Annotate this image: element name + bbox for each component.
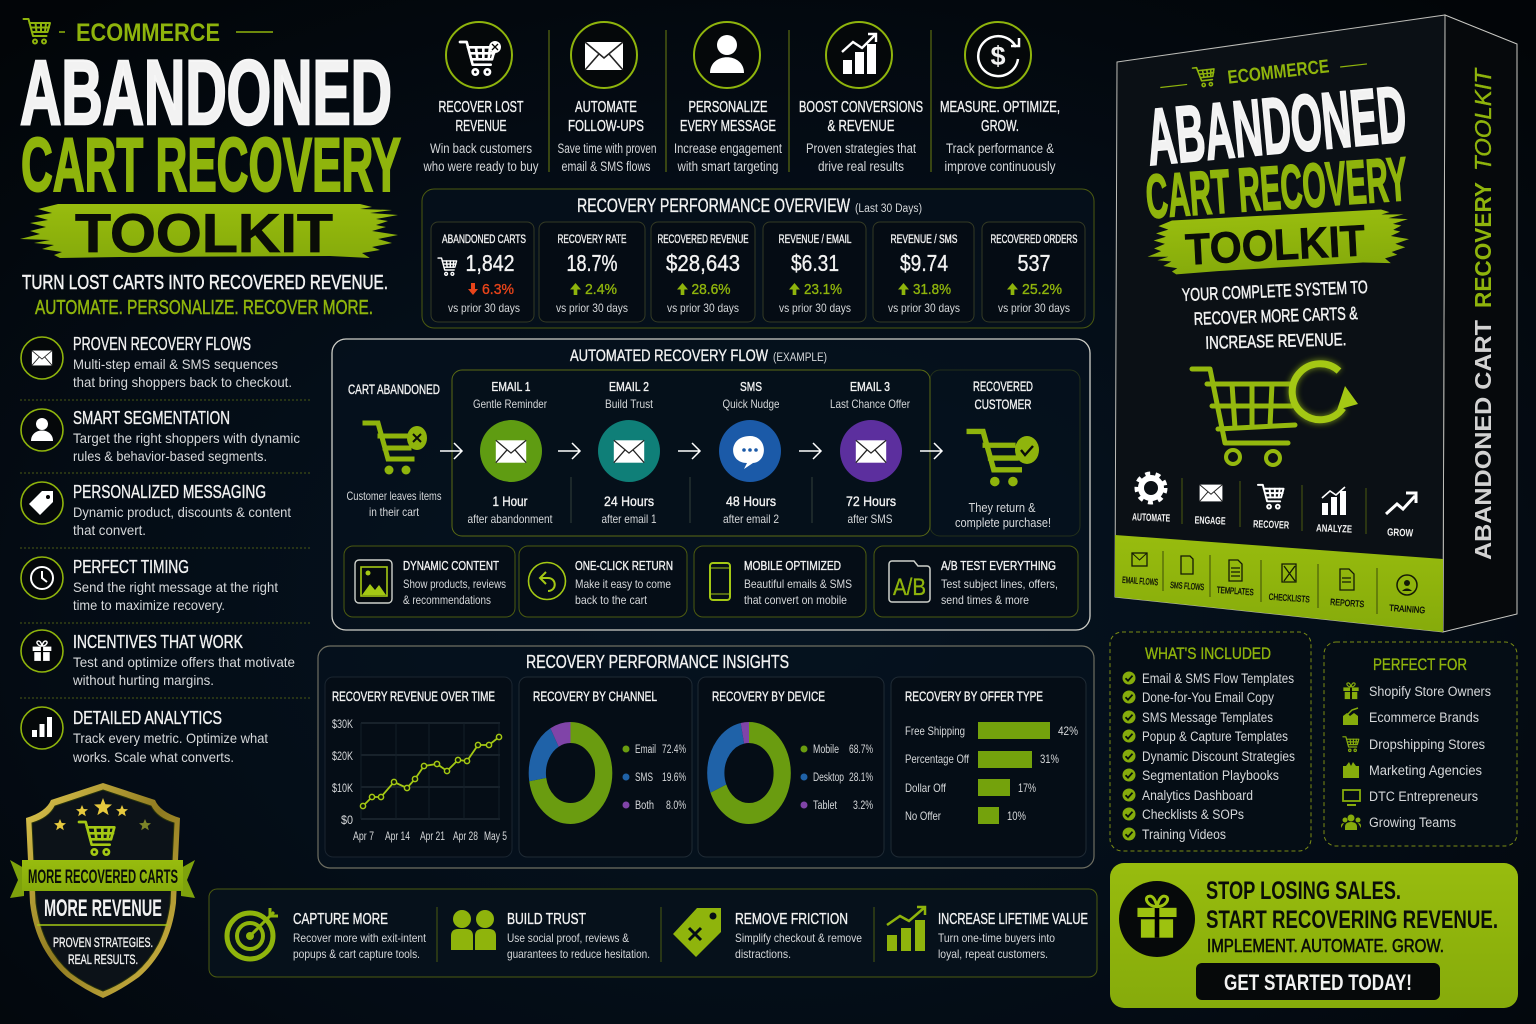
audience list: Shopify Store Owners (1369, 684, 1491, 699)
benefit: build trust: Use social proof, reviews & (507, 931, 629, 945)
metric: recovery rate: RECOVERY RATE (558, 234, 627, 246)
benefit: capture more: popups & cart capture tools. (293, 947, 420, 961)
metric: recovered revenue: vs prior 30 days (667, 301, 739, 315)
metric: revenue per email: REVENUE / EMAIL (778, 234, 852, 246)
chart: recovery by offer type: 31% (1040, 752, 1059, 766)
metric: revenue per sms (873, 222, 974, 322)
panel: benefits list (20, 334, 310, 765)
metric: revenue per sms: 31.8% (913, 281, 951, 298)
chart: recovery by channel: 8.0% (666, 800, 686, 812)
chart: revenue over time: Apr 28 (453, 831, 478, 843)
band item: training (1389, 575, 1426, 615)
band item: checklists: CHECKLISTS (1268, 592, 1310, 604)
chart: recovery by offer type: 10% (1007, 809, 1026, 823)
ribbon: more recovered carts (10, 860, 195, 898)
metric: recovered orders: RECOVERED ORDERS (990, 234, 1078, 246)
box icon: recover: RECOVER (1253, 518, 1290, 532)
metric: revenue per email: 23.1% (804, 281, 842, 298)
box tagline (1181, 277, 1368, 353)
strip: bottom benefits (209, 889, 1097, 977)
panel: automated recovery flow (332, 339, 1090, 630)
metric: recovered orders: 537 (1018, 250, 1050, 276)
value prop: recover lost revenue: Win back customers (430, 141, 532, 156)
header: ecommerce eyebrow (24, 19, 273, 47)
step: email 3 (830, 379, 910, 526)
chart: revenue over time: Apr 14 (385, 831, 410, 843)
included checklist (1122, 671, 1295, 842)
flow start: cart abandoned: in their cart (369, 505, 420, 519)
chart: recovery by device: 68.7% (849, 744, 873, 756)
panel: perfect for: PERFECT FOR (1373, 655, 1467, 674)
metric: abandoned carts: ABANDONED CARTS (442, 234, 526, 246)
box side: ABANDONED CART (1470, 320, 1496, 560)
chart: recovery by offer type: Dollar Off (905, 781, 947, 795)
callout: call to action: STOP LOSING SALES. (1206, 877, 1401, 905)
box eyebrow: ECOMMERCE (1227, 56, 1330, 89)
chart: recovery by channel: 19.6% (662, 772, 686, 784)
included checklist: SMS Message Templates (1142, 710, 1273, 725)
box icon: engage (1194, 485, 1226, 528)
step: email 1: 1 Hour (492, 493, 528, 509)
benefit: increase lifetime value: Turn one-time buyers into (938, 931, 1055, 945)
band item: templates: TEMPLATES (1216, 585, 1254, 597)
box tagline: INCREASE REVENUE. (1205, 329, 1347, 353)
benefit: proven recovery flows: Multi-step email & SMS sequences (73, 356, 278, 372)
value prop: boost conversions: Proven strategies that (806, 141, 916, 156)
chart: revenue over time: May 5 (484, 831, 507, 843)
chart: recovery by offer type: RECOVERY BY OFFER TYPE (905, 689, 1043, 704)
chart: recovery by channel: Both (635, 800, 654, 812)
benefit: personalized messaging: that convert. (73, 522, 146, 538)
value prop: boost conversions: BOOST CONVERSIONS (799, 99, 923, 116)
band item: email flows: EMAIL FLOWS (1122, 575, 1159, 587)
chart: recovery by channel (519, 677, 692, 857)
benefit: perfect timing: PERFECT TIMING (73, 557, 189, 577)
flow end: recovered customer: CUSTOMER (974, 397, 1032, 412)
benefit: capture more: CAPTURE MORE (293, 911, 388, 928)
panel: what's included (1110, 632, 1311, 851)
subtitle: TURN LOST CARTS INTO RECOVERED REVENUE. (22, 272, 388, 294)
chart: revenue over time (325, 677, 512, 857)
metric: abandoned carts: 1,842 (466, 250, 514, 276)
included checklist: Analytics Dashboard (1142, 788, 1253, 803)
header: ecommerce eyebrow: ECOMMERCE (76, 19, 220, 47)
chart: recovery by channel: Email (635, 744, 656, 756)
benefit: personalized messaging: Dynamic product, discounts & content (73, 504, 291, 520)
benefit: incentives that work (21, 630, 295, 688)
step: email 2: after email 1 (602, 512, 657, 526)
value prop: personalize every message: PERSONALIZE (688, 99, 768, 116)
icon: gift (1119, 881, 1195, 957)
value prop: measure optimize grow: GROW. (981, 118, 1019, 135)
benefit: proven recovery flows: PROVEN RECOVERY FLOWS (73, 334, 251, 354)
chart: revenue over time: $30K (332, 719, 353, 731)
metric: recovered orders: vs prior 30 days (998, 301, 1070, 315)
box icon: grow: GROW (1387, 527, 1413, 539)
metric: recovered orders: 25.2% (1022, 281, 1062, 298)
callout: call to action (1110, 863, 1518, 1008)
benefit: detailed analytics (21, 707, 268, 765)
step: email 3: 72 Hours (846, 493, 896, 509)
metric: revenue per email (763, 222, 866, 322)
benefit: remove friction: distractions. (735, 947, 791, 961)
flow end: recovered customer: complete purchase! (955, 515, 1051, 530)
panel: performance insights: RECOVERY PERFORMANCE INSIGHTS (526, 652, 789, 672)
flow start: cart abandoned (346, 382, 442, 519)
step: sms (719, 379, 781, 526)
step: email 2: EMAIL 2 (609, 379, 649, 394)
step: sms: Quick Nudge (722, 397, 780, 411)
chart: recovery by channel: 72.4% (662, 744, 686, 756)
feature: dynamic content (344, 546, 515, 617)
metric: revenue per sms: REVENUE / SMS (890, 234, 958, 246)
feature: a/b test everything (874, 546, 1078, 617)
value prop: measure optimize grow: Track performance & (946, 141, 1054, 156)
metric: recovered orders (982, 222, 1085, 322)
subtitle: AUTOMATE. PERSONALIZE. RECOVER MORE. (35, 297, 373, 319)
box front (1115, 15, 1445, 632)
box icon: recover (1253, 485, 1290, 532)
box side: RECOVERY (1470, 182, 1496, 308)
chart: recovery by device: RECOVERY BY DEVICE (712, 689, 825, 704)
chart: recovery by offer type: Percentage Off (905, 752, 970, 766)
benefit: perfect timing (21, 557, 278, 613)
feature: dynamic content: & recommendations (403, 593, 491, 607)
feature: a/b test everything: Test subject lines, offers, (941, 577, 1058, 591)
band item: reports (1330, 569, 1365, 609)
value prop: boost conversions: & REVENUE (828, 118, 894, 135)
benefit: detailed analytics: Track every metric. Optimize what (73, 730, 268, 746)
box title: TOOLKIT (1184, 216, 1367, 275)
band item: sms flows (1170, 556, 1205, 592)
included checklist: Dynamic Discount Strategies (1142, 749, 1295, 764)
badge: shield: MORE REVENUE (44, 895, 162, 922)
benefit: incentives that work: Test and optimize offers that motivate (73, 654, 295, 670)
band item: templates (1216, 560, 1254, 597)
top value props (423, 22, 1060, 174)
button: get started: GET STARTED TODAY! (1224, 970, 1412, 995)
box eyebrow (1159, 48, 1368, 96)
audience list (1341, 683, 1491, 830)
audience list: Dropshipping Stores (1369, 737, 1485, 752)
flow end: recovered customer: They return & (968, 500, 1036, 515)
icon: stars (54, 798, 151, 830)
box icon: engage: ENGAGE (1194, 514, 1226, 528)
step: sms: SMS (740, 379, 762, 394)
chart: recovery by device: 28.1% (849, 772, 873, 784)
chart: recovery by offer type: Free Shipping (905, 724, 965, 738)
benefit: remove friction (673, 908, 862, 961)
panel: perfect for (1324, 642, 1517, 846)
callout: call to action: IMPLEMENT. AUTOMATE. GROW. (1207, 936, 1444, 956)
metric: recovery rate: 2.4% (585, 281, 617, 298)
audience list: DTC Entrepreneurs (1369, 789, 1478, 804)
included checklist: Segmentation Playbooks (1142, 768, 1279, 783)
box icon: analyze: ANALYZE (1316, 522, 1352, 536)
benefit: personalized messaging: PERSONALIZED MESSAGING (73, 482, 266, 502)
included checklist: Email & SMS Flow Templates (1142, 671, 1294, 686)
benefit: increase lifetime value: loyal, repeat customers. (938, 947, 1048, 961)
chart: recovery by device: Mobile (813, 744, 839, 756)
badge: shield: PROVEN STRATEGIES. (53, 934, 153, 950)
chart: revenue over time: $10K (332, 783, 353, 795)
included checklist: Popup & Capture Templates (1142, 729, 1288, 744)
benefit: detailed analytics: works. Scale what converts. (72, 749, 234, 765)
chart: revenue over time: Apr 7 (353, 831, 374, 843)
badge: shield: REAL RESULTS. (68, 951, 138, 967)
panel: automated recovery flow: AUTOMATED RECOVERY FLOW (570, 346, 768, 365)
box tagline: YOUR COMPLETE SYSTEM TO (1181, 277, 1368, 305)
metric: abandoned carts: vs prior 30 days (448, 301, 520, 315)
audience list: Ecommerce Brands (1369, 710, 1479, 725)
feature: a/b test everything: A/B TEST EVERYTHING (941, 558, 1056, 573)
chart: recovery by channel: RECOVERY BY CHANNEL (533, 689, 657, 704)
chart: recovery by device: 3.2% (853, 800, 873, 812)
feature: mobile optimized: that convert on mobile (744, 593, 847, 607)
value prop: measure optimize grow: $ (990, 41, 1006, 71)
metric: revenue per sms: $9.74 (900, 250, 948, 276)
value prop: personalize every message: EVERY MESSAGE (680, 118, 776, 135)
feature: a/b test everything: A/B (893, 574, 926, 601)
step: email 2: 24 Hours (604, 493, 654, 509)
subtitle (22, 272, 388, 319)
value prop: recover lost revenue: REVENUE (456, 118, 506, 135)
metric: revenue per email: vs prior 30 days (779, 301, 851, 315)
box side: TOOLKIT (1470, 67, 1496, 171)
button: get started (1196, 963, 1440, 1000)
included checklist: Training Videos (1142, 827, 1226, 842)
value prop: boost conversions: drive real results (818, 159, 904, 174)
title: abandoned cart recovery toolkit: TOOLKIT (75, 202, 333, 264)
chart: revenue over time: Apr 21 (420, 831, 445, 843)
benefit: increase lifetime value: INCREASE LIFETIME VALUE (938, 911, 1088, 928)
badge: shield (10, 783, 195, 998)
value prop: recover lost revenue: who were ready to buy (423, 159, 539, 174)
panel: what's included: WHAT'S INCLUDED (1145, 644, 1271, 663)
benefit: smart segmentation (21, 408, 300, 464)
step: sms: 48 Hours (726, 493, 776, 509)
metric: revenue per email: $6.31 (791, 250, 839, 276)
chart: revenue over time: RECOVERY REVENUE OVER TIME (332, 689, 495, 704)
step: email 3: EMAIL 3 (850, 379, 890, 394)
benefit: proven recovery flows (21, 334, 292, 390)
benefit: smart segmentation: Target the right shoppers with dynamic (73, 430, 300, 446)
chart: recovery by offer type: 42% (1058, 724, 1078, 738)
benefit: smart segmentation: rules & behavior-based segments. (73, 448, 267, 464)
benefit: incentives that work: INCENTIVES THAT WORK (73, 632, 243, 652)
box icons row (1132, 474, 1416, 539)
title: abandoned cart recovery toolkit (20, 42, 401, 264)
step: email 1: Gentle Reminder (473, 397, 547, 411)
metric: abandoned carts: 6.3% (482, 281, 514, 298)
benefit: perfect timing: time to maximize recovery. (73, 597, 225, 613)
panel: performance overview: (Last 30 Days) (855, 203, 922, 215)
step: email 1 (468, 379, 553, 526)
value prop: measure optimize grow: improve continuously (944, 159, 1056, 174)
panel: automated recovery flow: (EXAMPLE) (773, 352, 827, 364)
feature: one-click return: back to the cart (575, 593, 648, 607)
box icon: analyze (1316, 487, 1352, 536)
benefit: capture more (227, 908, 427, 961)
feature: one-click return (519, 546, 687, 617)
feature: dynamic content: DYNAMIC CONTENT (403, 558, 499, 573)
chart: recovery by device (698, 677, 884, 857)
metric: revenue per sms: vs prior 30 days (888, 301, 960, 315)
metric: recovered revenue: 28.6% (692, 281, 730, 298)
box band: contents (1115, 535, 1443, 632)
value prop: recover lost revenue: RECOVER LOST (438, 99, 524, 116)
flow start: cart abandoned: CART ABANDONED (348, 382, 440, 397)
chart: recovery by offer type: 17% (1018, 781, 1036, 795)
metric: recovered revenue: RECOVERED REVENUE (658, 234, 749, 246)
step: email 3: Last Chance Offer (830, 397, 910, 411)
metric: recovery rate: vs prior 30 days (556, 301, 628, 315)
product box (1115, 15, 1517, 632)
box icon: automate: AUTOMATE (1132, 511, 1170, 525)
chart: revenue over time: $0 (341, 815, 353, 827)
benefit: remove friction: REMOVE FRICTION (735, 911, 848, 928)
value prop: automate follow-ups: email & SMS flows (562, 159, 651, 174)
benefit: smart segmentation: SMART SEGMENTATION (73, 408, 230, 428)
band item: sms flows: SMS FLOWS (1170, 580, 1205, 592)
panel: performance overview: RECOVERY PERFORMANCE OVERVIEW (577, 196, 850, 217)
value prop: personalize every message (674, 22, 782, 174)
value prop: boost conversions (799, 22, 923, 174)
panel: performance overview (422, 189, 1094, 328)
audience list: Growing Teams (1369, 815, 1456, 830)
chart: recovery by device: Tablet (813, 800, 838, 812)
included checklist: Checklists & SOPs (1142, 807, 1244, 822)
box title (1143, 69, 1410, 276)
benefit: capture more: Recover more with exit-intent (293, 931, 427, 945)
flow end: recovered customer: RECOVERED (973, 379, 1033, 394)
band item: email flows (1122, 553, 1159, 587)
benefit: incentives that work: without hurting margins. (72, 672, 214, 688)
value prop: personalize every message: Increase engagement (674, 141, 782, 156)
chart: recovery by offer type: No Offer (905, 809, 941, 823)
step: sms: after email 2 (723, 512, 779, 526)
box side (1443, 15, 1517, 632)
step: email 1: EMAIL 1 (492, 379, 530, 394)
benefit: personalized messaging (21, 482, 291, 538)
flow end: recovered customer (955, 379, 1051, 530)
box icon: grow (1386, 493, 1416, 539)
box icon: cart with refresh (1192, 364, 1358, 465)
band item: reports: REPORTS (1330, 597, 1365, 609)
ribbon: more recovered carts: MORE RECOVERED CARTS (28, 867, 178, 888)
panel: performance insights (318, 646, 1094, 868)
value prop: measure optimize grow: MEASURE. OPTIMIZE, (940, 99, 1060, 116)
title: abandoned cart recovery toolkit: ABANDONED (20, 42, 392, 144)
step: email 3: after SMS (848, 512, 892, 526)
value prop: recover lost revenue (423, 22, 539, 174)
metric: recovery rate (539, 222, 645, 322)
benefit: proven recovery flows: that bring shoppers back to checkout. (73, 374, 292, 390)
box tagline: RECOVER MORE CARTS & (1193, 303, 1358, 329)
benefit: perfect timing: Send the right message at the right (73, 579, 278, 595)
band item: training: TRAINING (1389, 603, 1426, 615)
value prop: measure optimize grow (940, 22, 1060, 174)
metric: recovery rate: 18.7% (566, 250, 618, 276)
value prop: automate follow-ups: Save time with proven (558, 141, 656, 156)
metric: abandoned carts (431, 222, 534, 322)
benefit: increase lifetime value (887, 907, 1088, 961)
value prop: personalize every message: with smart targeting (677, 159, 778, 174)
feature: one-click return: ONE-CLICK RETURN (575, 558, 673, 573)
feature: one-click return: Make it easy to come (575, 577, 671, 591)
step: email 1: after abandonment (468, 512, 553, 526)
benefit: build trust: BUILD TRUST (507, 911, 586, 928)
benefit: detailed analytics: DETAILED ANALYTICS (73, 708, 222, 728)
chart: recovery by offer type (891, 677, 1086, 857)
arrows between steps (440, 443, 942, 459)
value prop: automate follow-ups: FOLLOW-UPS (568, 118, 644, 135)
step: email 2: Build Trust (605, 397, 654, 411)
band item: checklists (1268, 564, 1310, 604)
chart: recovery by device: Desktop (813, 772, 844, 784)
feature: mobile optimized: Beautiful emails & SMS (744, 577, 852, 591)
metric: recovered revenue: $28,643 (666, 250, 740, 276)
chart: revenue over time: $20K (332, 751, 353, 763)
included checklist: Done-for-You Email Copy (1142, 690, 1274, 705)
flow start: cart abandoned: Customer leaves items (346, 489, 442, 503)
benefit: remove friction: Simplify checkout & remove (735, 931, 862, 945)
feature: mobile optimized: MOBILE OPTIMIZED (744, 558, 841, 573)
icon: shield cart (79, 822, 114, 855)
chart: recovery by channel: SMS (635, 772, 653, 784)
feature: mobile optimized (694, 546, 866, 617)
value prop: automate follow-ups (558, 22, 656, 174)
audience list: Marketing Agencies (1369, 763, 1482, 778)
benefit: build trust: guarantees to reduce hesitation. (507, 947, 650, 961)
feature: a/b test everything: send times & more (941, 593, 1029, 607)
feature: dynamic content: Show products, reviews (403, 577, 506, 591)
box icon: automate (1132, 474, 1170, 525)
metric: recovered revenue (651, 222, 755, 322)
title: abandoned cart recovery toolkit: CART RECOVERY (21, 123, 401, 208)
benefit: build trust (451, 910, 650, 961)
value prop: automate follow-ups: AUTOMATE (575, 99, 637, 116)
step: email 2 (598, 379, 660, 526)
